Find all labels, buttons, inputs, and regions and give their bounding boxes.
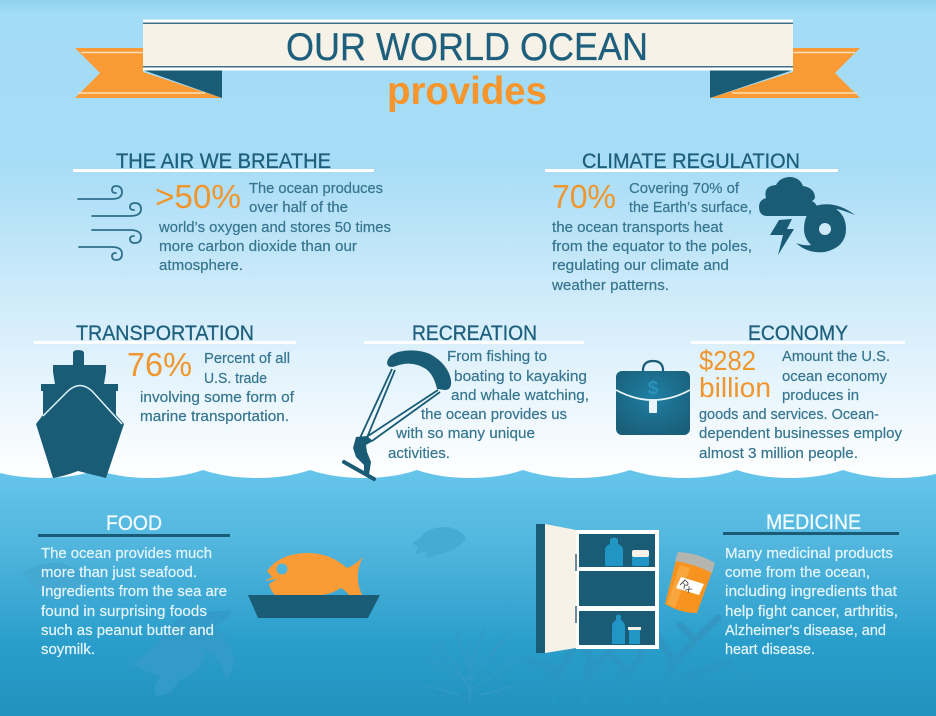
body text: the ocean transports heat — [552, 220, 723, 236]
statistic: 70% — [552, 178, 616, 215]
icon: briefcase — [616, 361, 690, 435]
body text — [140, 351, 295, 425]
title text: OUR WORLD OCEAN — [286, 26, 648, 69]
body text: Covering 70% of — [629, 181, 740, 197]
background sky — [0, 0, 936, 480]
body text: weather patterns. — [551, 278, 669, 294]
heading: RECREATION — [412, 321, 537, 345]
body text: the Earth’s surface, — [629, 200, 752, 216]
body text: over half of the — [249, 200, 348, 216]
right ribbon fold — [710, 70, 793, 98]
body text — [551, 181, 752, 294]
heading: MEDICINE — [766, 510, 861, 534]
heading: ECONOMY — [748, 321, 848, 345]
left ribbon fold — [143, 70, 222, 98]
panel: recreation — [344, 321, 589, 479]
body text: The ocean provides much — [41, 546, 212, 562]
banner plate — [143, 20, 793, 70]
statistic: 76% — [127, 346, 192, 383]
body text: From fishing to — [447, 349, 547, 365]
statistic: $282 — [699, 345, 756, 376]
icon: pill bottle — [665, 552, 715, 613]
panel: transportation — [34, 321, 296, 478]
body text: found in surprising foods — [41, 604, 207, 620]
body text: more than just seafood. — [41, 565, 197, 581]
body text: with so many unique — [395, 426, 535, 442]
lightning — [770, 219, 794, 255]
icon: ship — [36, 350, 124, 478]
panel: food — [38, 511, 380, 658]
body text: heart disease. — [725, 642, 815, 658]
body text: boating to kayaking — [454, 369, 587, 385]
body text: U.S. trade — [204, 371, 267, 387]
body text: Ingredients from the sea are — [41, 584, 227, 600]
ocean waves — [0, 470, 936, 716]
panel: the air we breathe — [73, 149, 391, 274]
icon: faint fan coral — [425, 628, 518, 702]
body text: world’s oxygen and stores 50 times — [158, 220, 391, 236]
panel: medicine — [536, 510, 899, 658]
icon: briefcase: $ — [648, 378, 659, 399]
icon: faint fish top — [412, 527, 466, 558]
cloud — [759, 177, 818, 216]
title banner — [75, 20, 860, 98]
heading: TRANSPORTATION — [76, 321, 254, 345]
icon: faint branch coral — [530, 618, 745, 702]
body text: goods and services. Ocean- — [699, 407, 879, 423]
icon: kitesurfer — [344, 350, 451, 479]
heading: CLIMATE REGULATION — [582, 149, 800, 173]
icon: pill bottle: Rx — [677, 578, 695, 596]
body text: come from the ocean, — [725, 565, 870, 581]
statistic: billion — [699, 372, 771, 403]
body text: atmosphere. — [159, 258, 243, 274]
body text: ocean economy — [782, 369, 888, 385]
icon: faint turtle — [132, 610, 234, 696]
body text: including ingredients that — [725, 584, 897, 600]
panel: climate regulation — [545, 149, 855, 294]
statistic — [699, 345, 771, 403]
body text — [725, 546, 898, 658]
body text: and whale watching, — [451, 388, 589, 404]
left ribbon tail — [75, 48, 222, 98]
body text: produces in — [782, 388, 859, 404]
body text: more carbon dioxide than our — [159, 239, 357, 255]
right ribbon tail — [710, 48, 860, 98]
heading: FOOD — [106, 511, 162, 535]
body text: involving some form of — [140, 390, 295, 406]
body text: such as peanut butter and — [41, 623, 214, 639]
icon: medicine cabinet — [536, 524, 659, 653]
body text: regulating our climate and — [552, 258, 729, 274]
body text: Alzheimer's disease, and — [725, 623, 886, 639]
body text: marine transportation. — [140, 409, 289, 425]
faint sea life background — [22, 527, 745, 702]
body text: from the equator to the poles, — [552, 239, 752, 255]
body text: the ocean provides us — [421, 407, 567, 423]
body text: soymilk. — [41, 642, 95, 658]
body text: almost 3 million people. — [699, 446, 858, 462]
statistic: >50% — [155, 178, 241, 215]
body text: Percent of all — [204, 351, 290, 367]
body text: Amount the U.S. — [782, 349, 890, 365]
icon: wind — [78, 186, 141, 260]
subtitle: provides — [387, 70, 547, 113]
panel: economy — [616, 321, 905, 462]
body text: dependent businesses employ — [699, 426, 903, 442]
body text: The ocean produces — [249, 181, 383, 197]
icon: faint fish left — [22, 563, 90, 600]
body text: Many medicinal products — [725, 546, 893, 562]
body text — [388, 349, 589, 462]
body text: activities. — [388, 446, 450, 462]
body text: help fight cancer, arthritis, — [725, 604, 898, 620]
hurricane — [796, 204, 855, 252]
body text — [699, 349, 903, 462]
body text — [158, 181, 391, 274]
heading: THE AIR WE BREATHE — [116, 149, 331, 173]
icon: storm — [759, 177, 855, 255]
icon: fish on plate — [248, 553, 380, 618]
body text — [41, 546, 227, 658]
